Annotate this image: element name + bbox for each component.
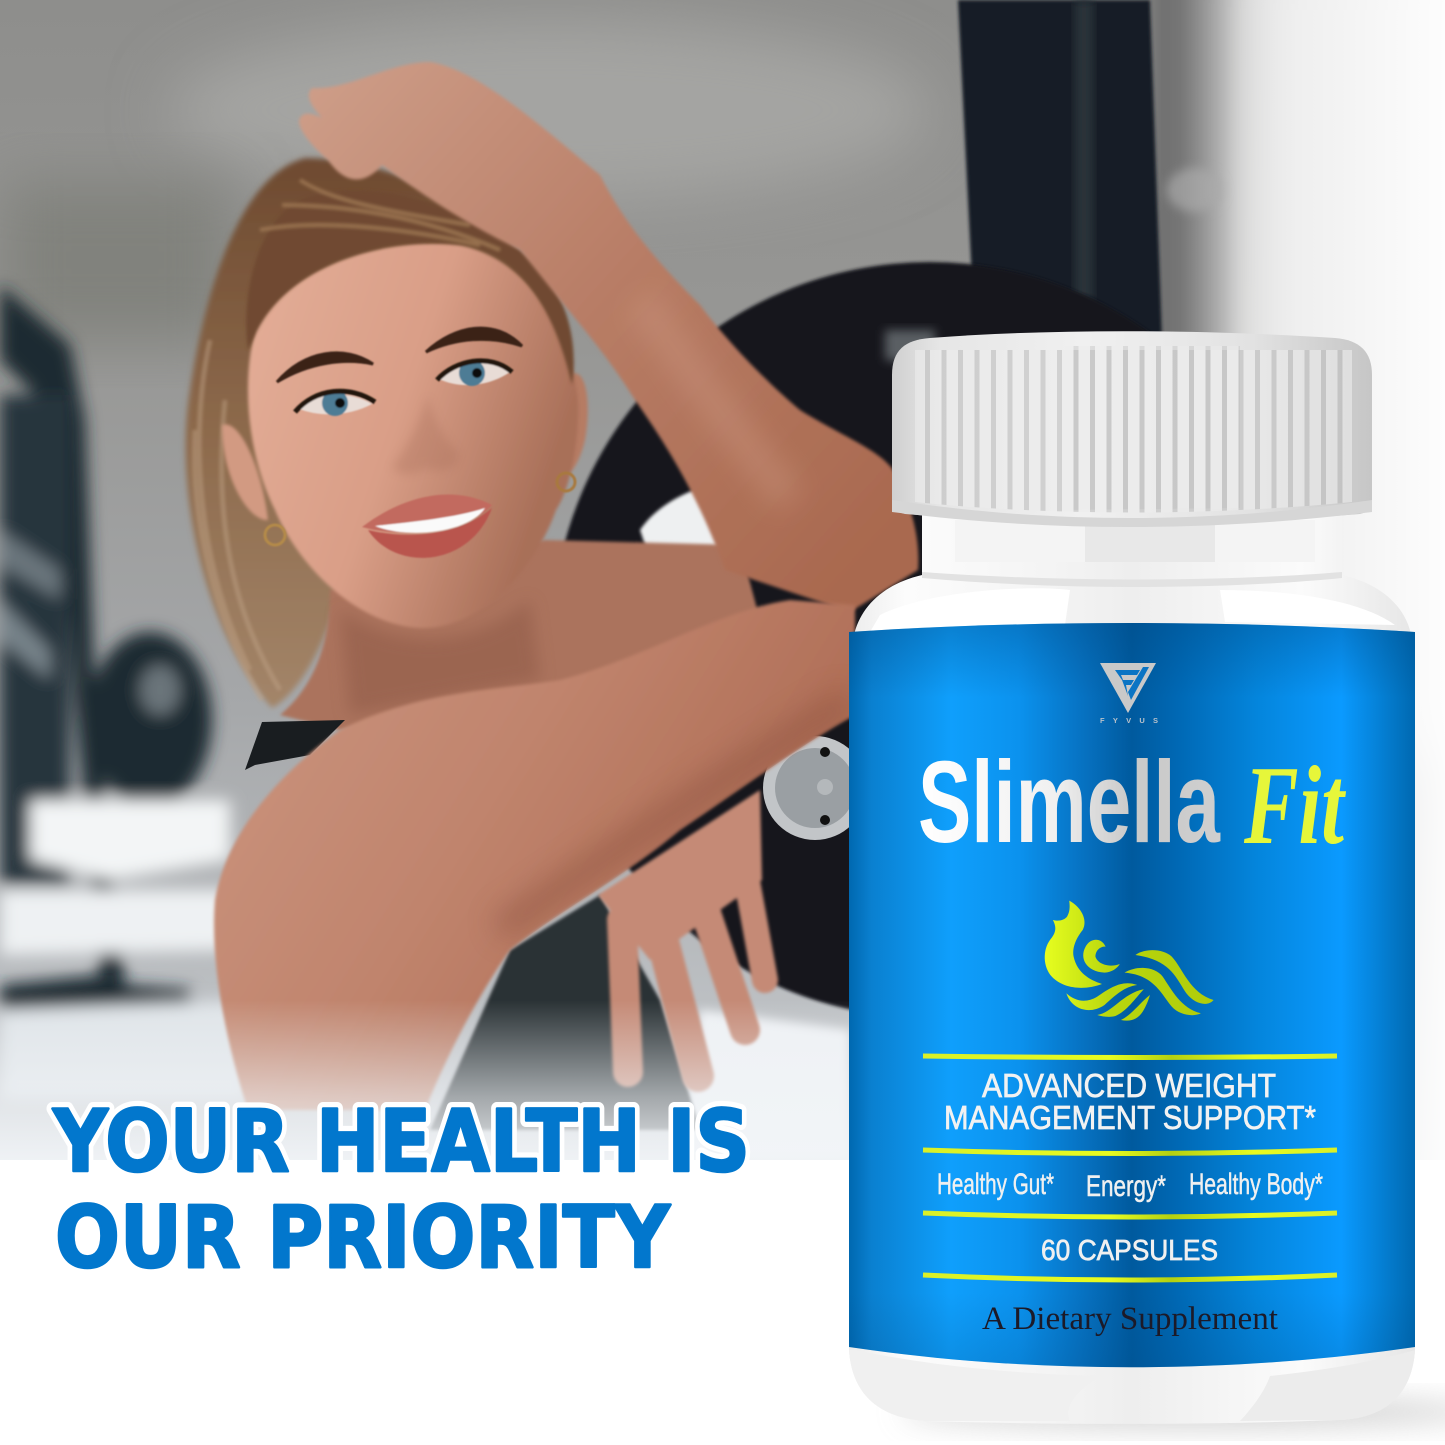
equipment rack (0, 285, 250, 1100)
raised arm and hand (299, 62, 918, 612)
brand logo (1100, 663, 1158, 725)
claim text: ADVANCED WEIGHT (982, 1067, 1276, 1104)
bottle neck highlights (870, 520, 1395, 632)
capsule count: 60 CAPSULES (1041, 1235, 1218, 1267)
benefits: Healthy Gut* (937, 1168, 1054, 1201)
icon: phoenix (1045, 901, 1214, 1021)
supplement bottle (849, 331, 1415, 1424)
sports top (245, 720, 700, 1130)
product name: Slimella (918, 737, 1221, 867)
benefits: Energy* (1086, 1170, 1166, 1203)
face (222, 243, 588, 628)
lower arm and shoulder (214, 600, 855, 1110)
bottle body (849, 510, 1415, 1424)
nose shading (396, 410, 453, 472)
right side fade (1180, 0, 1445, 1160)
benefits: Healthy Body* (1189, 1168, 1323, 1201)
brand logo: FYVUS (1100, 716, 1158, 725)
bottle shadow (900, 1394, 1445, 1430)
silver plate hub (763, 736, 849, 840)
headline (52, 1092, 750, 1288)
hair front (246, 180, 574, 385)
hair back (186, 158, 568, 708)
product name: Fit (1243, 744, 1346, 868)
hanging hand (598, 790, 765, 1076)
weight plate (552, 262, 1308, 1160)
barbell column (958, 0, 1162, 340)
facial features (265, 328, 575, 558)
blue label (849, 623, 1415, 1367)
cap (892, 331, 1372, 527)
claim text (944, 1067, 1316, 1136)
supplement note: A Dietary Supplement (982, 1301, 1278, 1337)
headline line 1: YOUR HEALTH IS (52, 1092, 750, 1192)
fade overlay (0, 1000, 850, 1160)
headline line 2: OUR PRIORITY (55, 1188, 672, 1288)
headline line 1: YOUR HEALTH IS (52, 1092, 750, 1192)
claim text: MANAGEMENT SUPPORT* (944, 1099, 1316, 1136)
bottle base highlights (849, 1350, 1415, 1421)
benefits (937, 1168, 1323, 1203)
white footer band (0, 1160, 1445, 1445)
neck and chest (280, 540, 760, 730)
